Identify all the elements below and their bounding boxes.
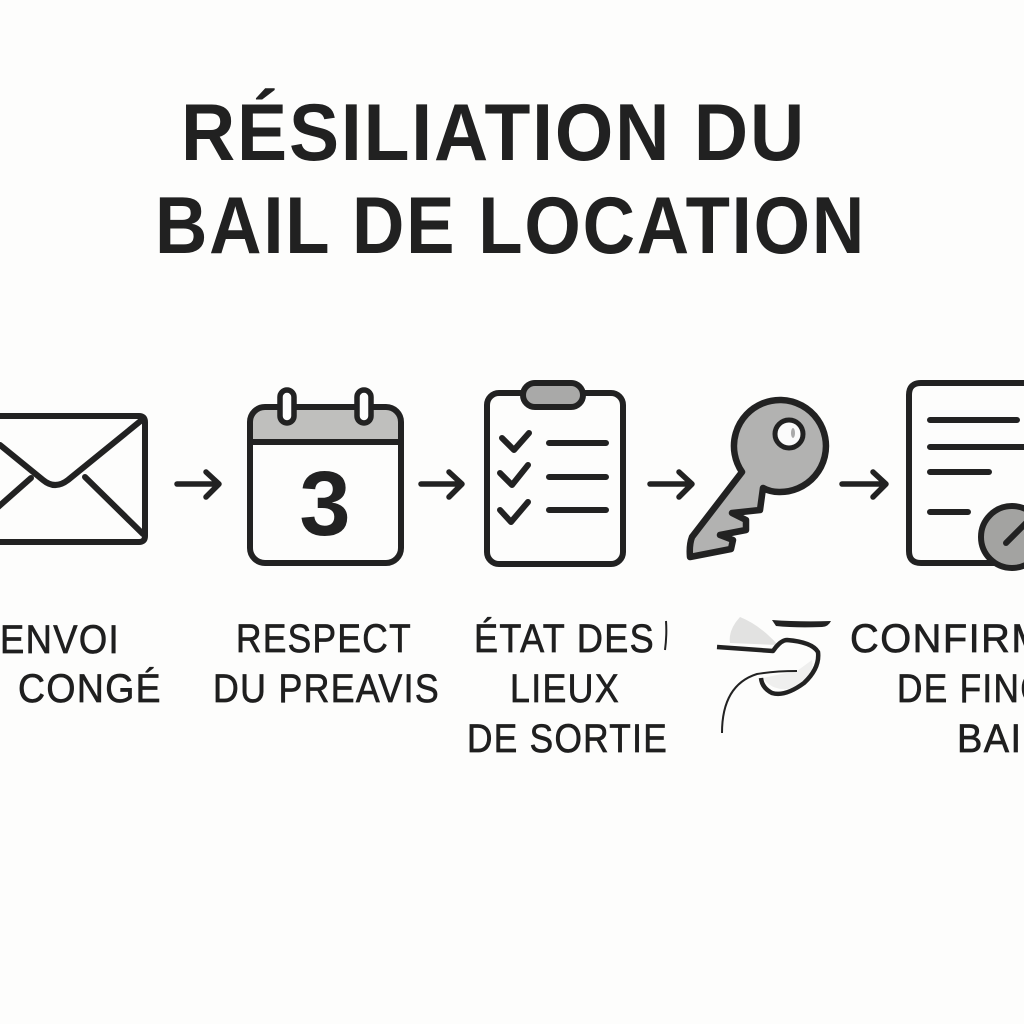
title: BAIL DE LOCATION bbox=[155, 181, 866, 271]
label: step 3: LIEUX bbox=[510, 667, 620, 711]
title bbox=[155, 87, 866, 271]
arrow: step 4 to 5 bbox=[842, 472, 886, 497]
arrow: step 3 to 4 bbox=[650, 472, 692, 497]
icon: envelope bbox=[0, 416, 145, 542]
number on calendar: 3 bbox=[299, 453, 351, 555]
label: step 2: RESPECT bbox=[236, 617, 412, 661]
label: step 2 bbox=[213, 617, 440, 711]
icon: document with seal bbox=[909, 383, 1024, 568]
garbled drawing: step 4 bbox=[717, 617, 831, 733]
label: step 3 bbox=[467, 616, 668, 761]
label: step 3: DE SORTIE bbox=[467, 717, 668, 761]
icon: calendar bbox=[250, 390, 401, 563]
label: step 5 bbox=[850, 617, 1024, 761]
label: step 1: ENVOI bbox=[0, 618, 120, 662]
title: RÉSILIATION DU bbox=[181, 87, 806, 178]
label: step 3: ÉTAT DES bbox=[474, 616, 655, 661]
arrow: step 2 to 3 bbox=[421, 472, 462, 497]
label: step 1: CONGÉ bbox=[18, 666, 162, 711]
icon: key bbox=[690, 400, 826, 557]
label: step 2: DU PREAVIS bbox=[213, 667, 440, 711]
icon: clipboard checklist bbox=[487, 383, 623, 564]
arrow: step 1 to 2 bbox=[177, 472, 219, 497]
label: step 1 bbox=[0, 618, 162, 711]
